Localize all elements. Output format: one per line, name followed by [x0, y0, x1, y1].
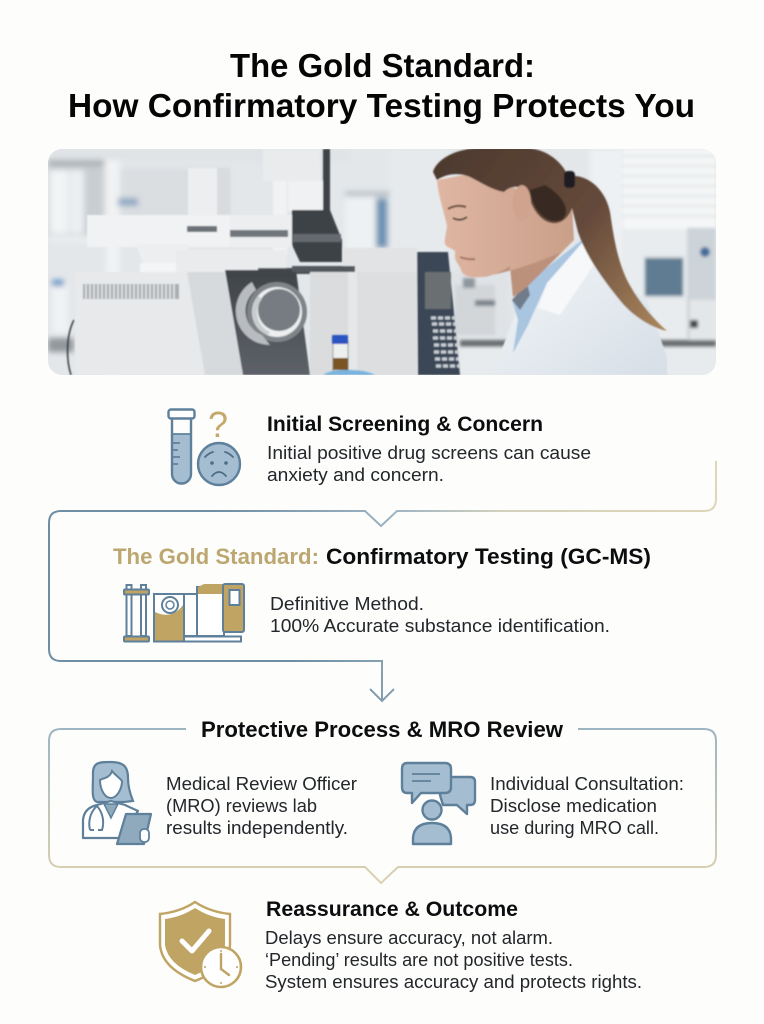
text: individual consultation: Disclose medication	[490, 795, 657, 816]
text: reassurance description: ‘Pending’ results are not positive tests.	[265, 949, 573, 970]
icon: test tube and worried face	[168, 404, 240, 485]
text: MRO review	[166, 773, 357, 838]
technician	[433, 148, 667, 375]
background lab equipment	[456, 227, 716, 349]
heading: protective process: Protective Process & MRO Review	[201, 717, 564, 742]
step 1: initial screening	[168, 404, 591, 485]
text: reassurance description: Delays ensure accuracy, not alarm.	[265, 927, 553, 948]
panel: protective process outline	[49, 729, 716, 883]
grille vents	[83, 284, 179, 299]
connector panel: confirmatory testing outline and arrow	[49, 461, 716, 701]
text: reassurance description: System ensures accuracy and protects rights.	[265, 971, 642, 992]
text: individual consultation	[490, 773, 684, 838]
heading: the gold standard: Confirmatory Testing (GC-MS)	[326, 544, 651, 569]
GC-MS instrument	[68, 149, 460, 375]
keypad control panel	[417, 252, 460, 375]
text: MRO review: Medical Review Officer	[166, 773, 357, 794]
text: initial screening description: Initial positive drug screens can cause	[267, 442, 591, 463]
title	[68, 47, 695, 124]
icon: individual consultation	[402, 763, 475, 844]
text: MRO review: (MRO) reviews lab	[166, 795, 317, 816]
heading: initial screening: Initial Screening & Concern	[267, 413, 543, 436]
text: definitive method	[270, 593, 610, 636]
photo: technician at GC-MS instrument	[48, 148, 716, 375]
title: How Confirmatory Testing Protects You	[68, 87, 695, 124]
window blinds	[624, 149, 716, 230]
heading: the gold standard: The Gold Standard:	[113, 544, 319, 569]
text: individual consultation: use during MRO call.	[490, 817, 659, 838]
heading: the gold standard	[113, 544, 651, 569]
text: definitive method: Definitive Method.	[270, 593, 424, 614]
icon: test tube and worried face: ?	[208, 404, 228, 445]
heading: reassurance and outcome: Reassurance & Outcome	[266, 898, 518, 921]
sample vial and gloved hand	[323, 335, 375, 375]
icon: shield and clock	[160, 902, 241, 987]
lab shelves in the background	[48, 149, 624, 375]
text: definitive method: 100% Accurate substance identification.	[270, 615, 610, 636]
title: The Gold Standard:	[230, 47, 535, 84]
icon: medical review officer	[83, 762, 151, 844]
text: initial screening description	[267, 442, 591, 485]
text: MRO review: results independently.	[166, 817, 348, 838]
icon: GC-MS machine	[124, 584, 244, 642]
text: individual consultation: Individual Consultation:	[490, 773, 684, 794]
text: initial screening description: anxiety and concern.	[267, 464, 444, 485]
text: reassurance description	[265, 927, 642, 992]
